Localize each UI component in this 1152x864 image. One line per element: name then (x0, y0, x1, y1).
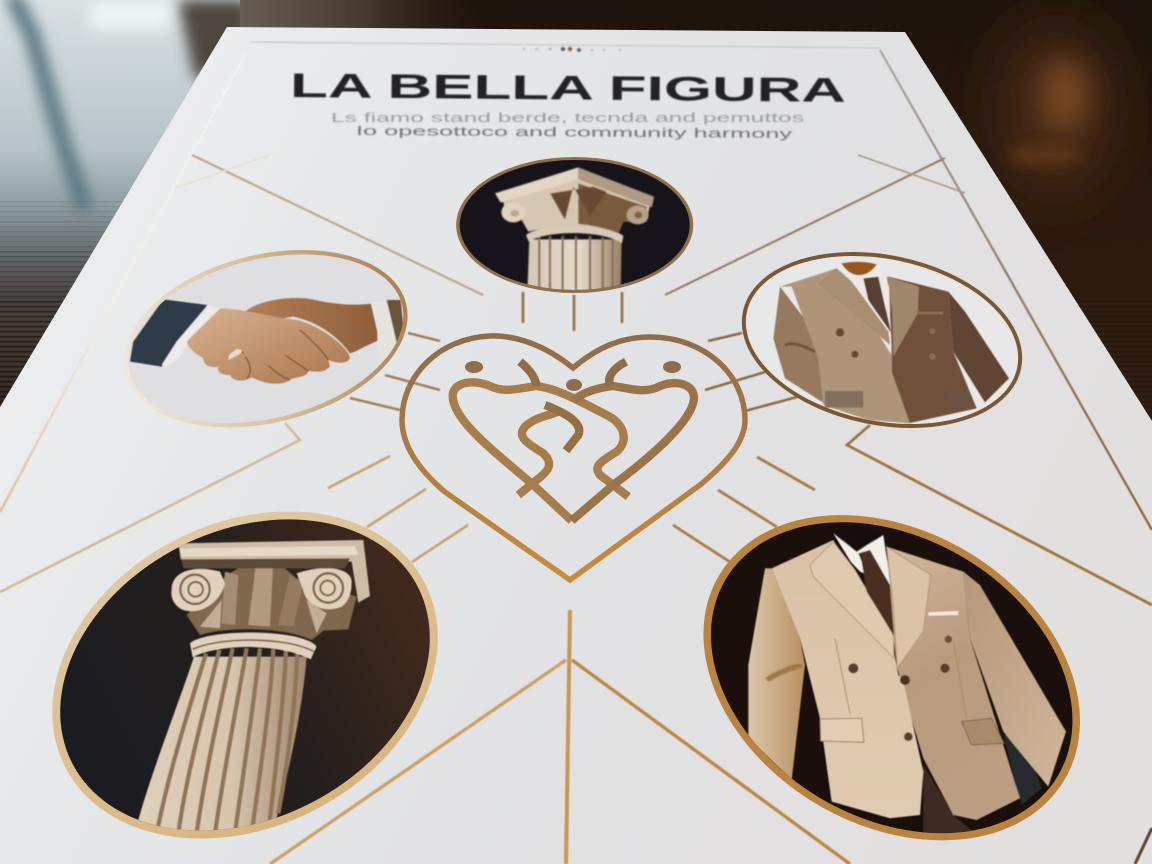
shaft (138, 657, 307, 837)
pocket square (928, 611, 958, 616)
necking (190, 632, 317, 659)
left sleeve (748, 568, 805, 780)
subtitle (331, 110, 805, 141)
medallion: small suit (742, 252, 1022, 428)
title: LA BELLA FIGURA (290, 67, 846, 110)
front hand (187, 308, 350, 384)
central heart emblem (402, 336, 745, 580)
pockets (820, 718, 864, 742)
medallion: large suit (703, 515, 1080, 840)
medallion: large column (52, 512, 438, 838)
abacus (495, 167, 578, 203)
wooden table background (0, 0, 1152, 420)
left body (772, 540, 923, 818)
buttons (848, 663, 858, 673)
buttons and pockets (836, 328, 844, 337)
dark sleeve (130, 299, 207, 367)
jacket right side (888, 277, 977, 423)
trousers and dark patch (923, 765, 973, 835)
subtitle line 2: Io opesottoco and community harmony (356, 123, 793, 141)
lapels (810, 542, 894, 658)
right cuff (371, 300, 398, 362)
intertwined figures (453, 362, 694, 521)
acanthus (187, 558, 357, 640)
capital (503, 178, 650, 233)
volutes (171, 569, 225, 611)
abacus (178, 540, 370, 603)
back hand (239, 298, 379, 353)
right body (887, 547, 1020, 820)
subtitle line 1: Ls fiamo stand berde, tecnda and pemuttos (331, 110, 805, 125)
jacket left side (773, 287, 824, 403)
shaft (527, 239, 622, 293)
lapels (836, 268, 890, 346)
medallion: top column (456, 157, 693, 293)
right sleeve (963, 572, 1066, 787)
figure heads (465, 361, 483, 373)
outer heart (402, 336, 745, 580)
medallion: handshake (124, 250, 408, 428)
top ornament dots (523, 47, 621, 52)
shirt and tie (833, 533, 890, 585)
shirt, neck and tie (848, 268, 891, 312)
